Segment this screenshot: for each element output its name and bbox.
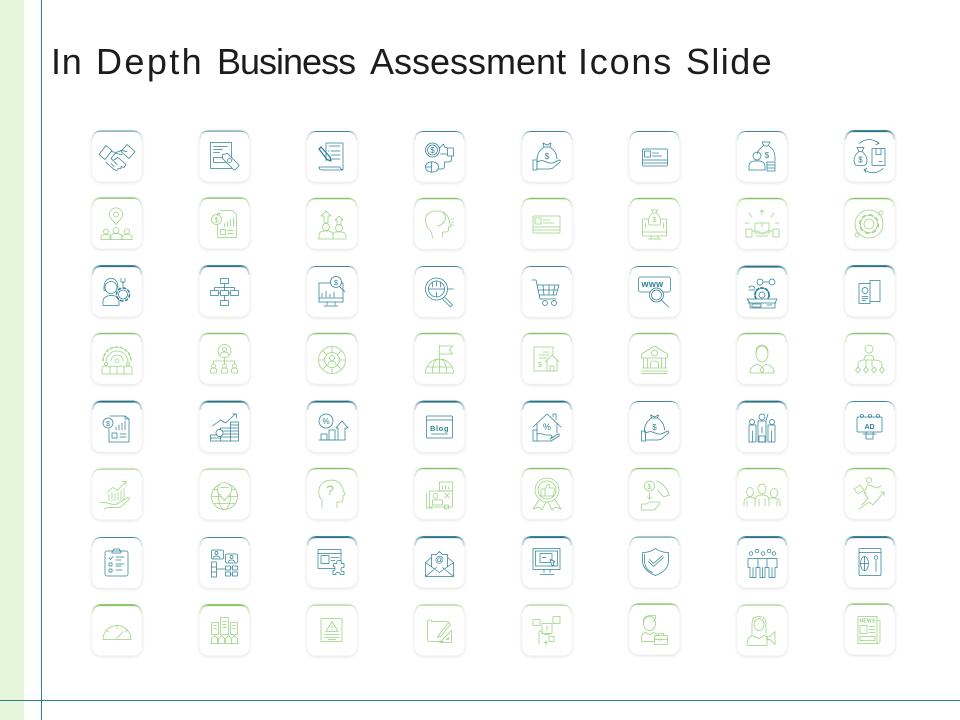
card: businessman — [737, 333, 787, 384]
icon: brochure — [859, 280, 880, 304]
icon: blue financial report: $ — [106, 421, 110, 428]
icon: org hierarchy — [210, 344, 238, 373]
icon: head profile — [426, 211, 454, 238]
card: blueprint — [414, 604, 464, 656]
icon: businessman — [750, 345, 774, 373]
icon: globe with pin — [212, 483, 238, 510]
card: thumb up badge — [522, 468, 572, 519]
card: AD billboard — [845, 401, 895, 452]
icon: coin between hands: $ — [648, 484, 652, 491]
icon: monitor analytics: $ — [334, 280, 338, 287]
card: email envelope — [414, 536, 464, 588]
card: store with gears — [737, 266, 787, 317]
card: man with briefcase — [630, 604, 680, 654]
card: warning document — [307, 604, 357, 656]
icon: green credit card — [533, 216, 560, 233]
card: team row — [737, 536, 787, 588]
card: head profile — [414, 198, 464, 249]
icon: coin hand and mouse: $ — [430, 146, 435, 155]
card: target circle person — [307, 333, 357, 384]
icon: gear with orbit — [855, 210, 883, 238]
card: shopping cart — [522, 266, 572, 317]
icon: percent chart: % — [322, 417, 330, 426]
icon: team with leader — [749, 414, 775, 442]
icon: team row — [748, 549, 777, 578]
card: team with leader — [737, 401, 787, 452]
title: Slide — [686, 41, 773, 82]
icon: head with question: ? — [326, 482, 334, 498]
card: person network — [845, 333, 895, 384]
icon: person network — [856, 345, 884, 373]
icon: monitor with money bag: $ — [653, 217, 657, 224]
icon: document with tag — [210, 142, 239, 170]
card: money bag and box exchange — [845, 130, 895, 182]
card: percent chart — [307, 401, 357, 452]
card: gear with orbit — [845, 198, 895, 249]
card: org hierarchy — [200, 333, 250, 384]
icon: hand with growth chart — [100, 482, 129, 510]
icon: AD billboard: AD — [864, 424, 875, 431]
card: blog window — [414, 401, 464, 452]
icon: speedometer — [103, 626, 131, 640]
card: hand with growth chart — [92, 468, 142, 520]
card: flowchart — [200, 266, 250, 316]
icon: book with settings — [859, 548, 881, 576]
card: growth coins — [200, 401, 250, 452]
icon: person with money bag and coins: $ — [765, 151, 770, 160]
icon: warning document — [321, 618, 342, 642]
title: Business — [217, 41, 355, 82]
card: www search — [630, 266, 680, 317]
card: clipboard checklist — [92, 537, 142, 588]
icon: security shield — [642, 548, 668, 576]
icon: money bag and box exchange: $ — [858, 156, 863, 164]
card: bank — [630, 333, 680, 384]
icon: money bag in hand two: $ — [652, 423, 657, 432]
icon: thumb up badge — [533, 478, 561, 510]
icon: www search: www — [641, 279, 664, 289]
icon: infographic report — [426, 482, 452, 509]
icon: email envelope: @ — [435, 554, 444, 564]
card: coin hand and mouse — [414, 131, 464, 182]
card: buildings and crowd — [200, 604, 250, 656]
card: infographic report — [414, 468, 464, 519]
card: three business people — [737, 468, 787, 519]
card: chat and data flow — [200, 537, 250, 588]
card: coin between hands — [630, 468, 680, 519]
card: blue financial report — [92, 401, 142, 452]
title: Assessment — [370, 41, 566, 82]
icon: credit card — [642, 149, 668, 166]
icon: money bag in hand: $ — [545, 152, 550, 161]
icon: magnifier with globe — [426, 278, 454, 307]
card: checklist scroll — [307, 131, 357, 182]
card: support agent with gear — [92, 266, 142, 316]
icon: handshake — [99, 144, 135, 170]
icon: woman with megaphone — [747, 616, 775, 646]
icon: clipboard checklist — [105, 549, 128, 576]
icon: document and house: $ — [538, 362, 542, 369]
card: book with settings — [845, 536, 895, 588]
card: monitor analytics — [307, 266, 357, 317]
icon: social media hand: f — [546, 626, 548, 634]
card: green credit card — [522, 198, 572, 249]
icon: bank — [642, 346, 668, 374]
icon: idea pin with team — [101, 208, 132, 240]
card: running man with arrow — [845, 468, 895, 519]
icon: monitor window — [533, 548, 560, 574]
icon: house percent in hand: % — [543, 422, 551, 432]
card: person with money bag and coins — [737, 131, 787, 182]
card: head with question — [307, 468, 357, 519]
card: money bag in hand two — [630, 401, 680, 452]
card: box in hands with arrows — [737, 198, 787, 249]
card: money bag in hand — [522, 131, 572, 182]
card: brochure — [845, 266, 895, 316]
icon: support agent with gear — [103, 278, 130, 306]
card: financial report — [200, 198, 250, 248]
icon: newspaper: NEWS — [859, 618, 876, 624]
card: speedometer — [92, 604, 142, 656]
card: document with tag — [200, 130, 250, 182]
card: newspaper — [845, 604, 895, 654]
icon: target circle person — [318, 346, 346, 374]
icon: running man with arrow — [854, 478, 884, 509]
card: browser with puzzle — [307, 536, 357, 588]
icon: buildings and crowd — [210, 618, 238, 644]
icon: people with up arrows — [318, 211, 346, 239]
card: security shield — [630, 536, 680, 588]
card: globe with flag — [414, 333, 464, 384]
card: globe with pin — [200, 468, 250, 520]
card: social media hand — [522, 604, 572, 656]
title: In — [51, 41, 83, 82]
card: magnifier with globe — [414, 266, 464, 317]
card: house percent in hand — [522, 401, 572, 452]
icon: chat and data flow — [212, 550, 238, 577]
left green band — [0, 0, 24, 720]
icon: browser with puzzle — [318, 550, 344, 574]
icon: flowchart — [210, 278, 238, 306]
title: Depth — [96, 41, 204, 82]
icon: three business people — [744, 484, 780, 506]
card: credit card — [630, 131, 680, 182]
title: Icons — [578, 41, 673, 82]
card: monitor window — [522, 536, 572, 588]
icon: checklist scroll — [319, 143, 343, 170]
card: monitor with money bag — [630, 198, 680, 249]
card: handshake — [92, 130, 142, 182]
icon: gear with workers — [102, 347, 132, 374]
card: idea pin with team — [92, 198, 142, 248]
icon: financial report: $ — [215, 218, 219, 224]
icon: shopping cart — [532, 280, 559, 306]
card: people with up arrows — [307, 198, 357, 249]
card: document and house — [522, 333, 572, 384]
icon: globe with flag — [426, 345, 454, 373]
icon: store with gears — [747, 279, 777, 308]
card: gear with workers — [92, 333, 142, 384]
icon: man with briefcase — [642, 616, 668, 644]
card: woman with megaphone — [737, 604, 787, 656]
icon: box in hands with arrows — [745, 210, 779, 237]
icon: blog window: Blog — [430, 424, 449, 433]
icon: blueprint — [428, 620, 452, 642]
icon: growth coins — [210, 414, 238, 441]
